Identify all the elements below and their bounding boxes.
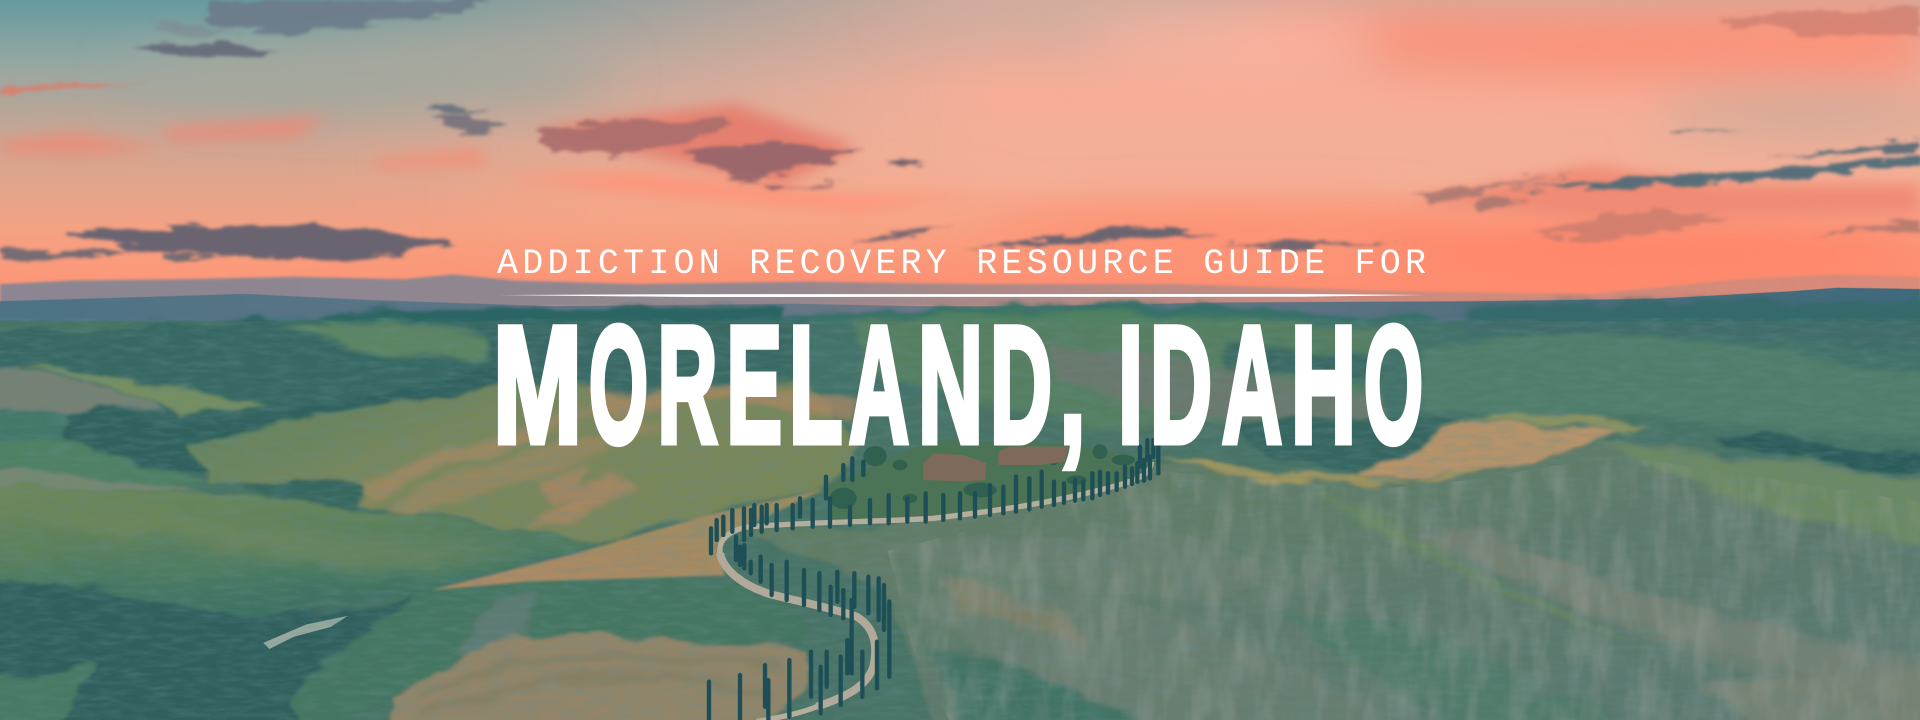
big meadow bbox=[0, 487, 600, 617]
title: Moreland, Idaho: M bbox=[493, 293, 582, 478]
river glint bbox=[263, 616, 348, 649]
upper centre hills bbox=[735, 300, 1920, 416]
sky glow bbox=[122, 2, 1920, 278]
horizon haze clouds bbox=[0, 274, 1920, 306]
muted gray tone over land bbox=[0, 321, 1920, 720]
dark tree line right bbox=[1708, 431, 1920, 480]
tree patch at slope foot bbox=[239, 480, 361, 506]
dark woodland bottom-left bbox=[0, 580, 441, 720]
golden strip and lit knoll bbox=[1157, 451, 1567, 487]
title: Moreland, Idaho: L bbox=[789, 293, 842, 478]
sky bbox=[0, 0, 1920, 306]
striped centre-left slope bbox=[184, 380, 857, 540]
title: Moreland, Idaho: , bbox=[1060, 293, 1086, 478]
lit ridge bbox=[431, 490, 823, 590]
farmhouses bbox=[923, 453, 987, 482]
title: Moreland, Idaho: A bbox=[849, 293, 909, 478]
base land bbox=[0, 321, 1920, 720]
title: Moreland, Idaho: D bbox=[990, 293, 1052, 478]
distant mountains bbox=[0, 288, 1920, 367]
right big hillside bbox=[747, 438, 1920, 720]
title: Moreland, Idaho: N bbox=[918, 293, 983, 478]
landscape bbox=[0, 288, 1920, 720]
soft pink streaks bbox=[0, 104, 1920, 220]
texture overlay bbox=[0, 318, 1920, 720]
title: Moreland, Idaho: D bbox=[1150, 293, 1212, 478]
lawn bbox=[827, 440, 1157, 523]
title: Moreland, Idaho: R bbox=[658, 293, 718, 478]
title: Moreland, Idaho: E bbox=[726, 293, 782, 478]
harvested field bbox=[392, 633, 811, 720]
title: Moreland, Idaho: H bbox=[1291, 293, 1356, 478]
cypress trees bbox=[709, 440, 1158, 720]
title: Moreland, Idaho: A bbox=[1222, 293, 1282, 478]
subtitle: addiction recovery resource guide for: ADDICTION RECOVERY RESOURCE GUIDE FOR bbox=[497, 244, 1426, 284]
dark hills behind title bbox=[502, 321, 808, 392]
gray and light fields at left bbox=[0, 367, 165, 413]
title: Moreland, Idaho: I bbox=[1118, 293, 1143, 478]
far left tree line and hills bbox=[0, 306, 784, 465]
dark tree clump bbox=[64, 407, 218, 471]
hillside striation bbox=[845, 453, 1920, 720]
divider rule bbox=[498, 294, 1425, 297]
cliff below ridge bbox=[294, 576, 802, 720]
road bbox=[720, 462, 1152, 720]
hillside bands bbox=[857, 441, 1920, 720]
clouds bbox=[0, 0, 1920, 260]
farm and road detail bbox=[709, 440, 1158, 720]
subtitle and title overlay: O bbox=[1364, 293, 1423, 478]
farm trees bbox=[830, 444, 1135, 509]
organic hill shapes bbox=[0, 300, 1920, 720]
title: Moreland, Idaho: O bbox=[589, 293, 648, 478]
